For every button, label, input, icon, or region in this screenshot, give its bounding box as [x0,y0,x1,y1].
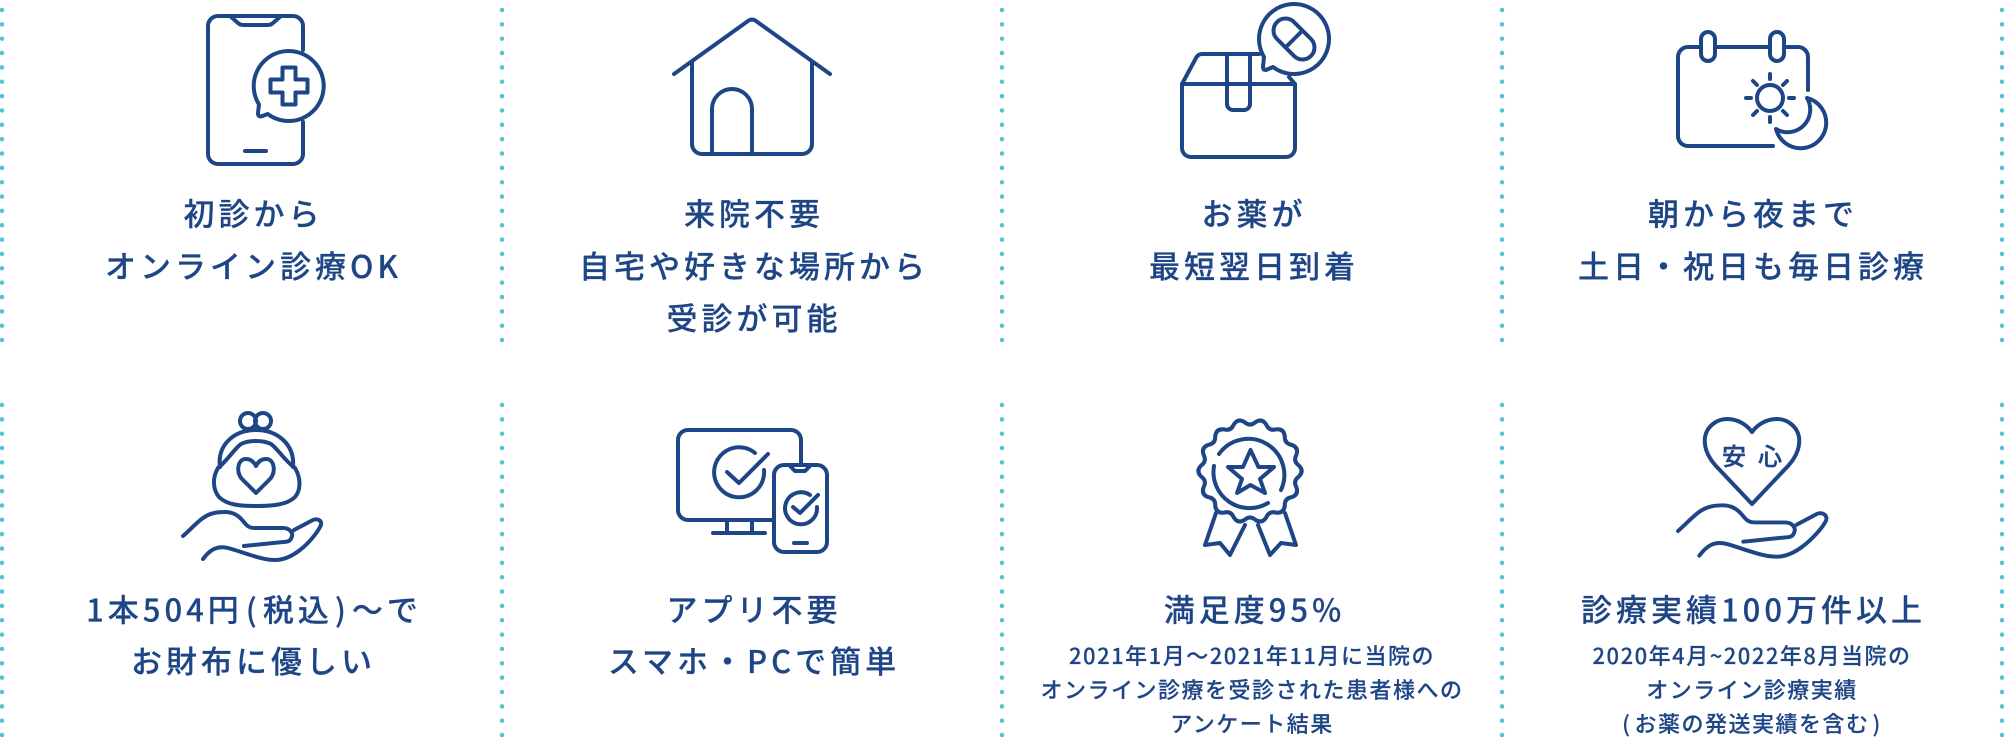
note: survey period: オンライン診療を受診された患者様への [1040,673,1464,705]
heading: no app needed: アプリ不要 [666,586,842,630]
icon: parcel with capsule bubble [1182,4,1329,157]
panel: 95% satisfaction [1040,414,1464,739]
note: results period: (お薬の発送実績を含む) [1622,707,1882,739]
panel: no app needed [608,430,900,682]
note: survey period: 2021年1月〜2021年11月に当院の [1069,639,1435,671]
note: results period: 2020年4月~2022年8月当院の [1593,639,1911,671]
panel: one million consultations [1581,419,1926,739]
panel: low price [86,413,422,682]
icon: rosette with star [1193,414,1307,555]
heading: first consultation online: オンライン診療OK [105,242,402,287]
heading: low price: お財布に優しい [131,637,376,682]
panel: next-day medicine delivery [1149,4,1359,287]
icon: smartphone with medical cross bubble [208,16,324,164]
heading: open morning to night, every day: 朝から夜まで [1648,190,1858,234]
note: results period: オンライン診療実績 [1646,673,1858,705]
heading: next-day medicine delivery: 最短翌日到着 [1149,242,1359,287]
heading: no app needed: スマホ・PCで簡単 [608,637,900,682]
note: survey period: アンケート結果 [1170,707,1334,739]
panel: no hospital visit [579,20,929,339]
panel: open morning to night, every day [1578,32,1928,287]
heading: next-day medicine delivery: お薬が [1202,190,1306,234]
heading: low price: 1本504円(税込)〜で [86,586,422,630]
heading: first consultation online: 初診から [184,190,324,234]
icon: coin purse on hand [183,413,321,560]
heading: open morning to night, every day: 土日・祝日も毎日診療 [1578,242,1928,287]
icon: calendar with sun and moon [1678,32,1826,148]
heading: no hospital visit: 受診が可能 [666,294,842,339]
heading: no hospital visit: 来院不要 [684,190,824,234]
icon text: 安心: 安心 [1722,437,1794,472]
panel: first consultation online [105,16,402,287]
heading: one million consultations: 診療実績100万件以上 [1581,586,1926,630]
icon: house [674,20,830,154]
icon: monitor and smartphone with check marks [678,430,827,552]
heading: no hospital visit: 自宅や好きな場所から [579,242,929,287]
heading: 95% satisfaction: 満足度95% [1164,586,1345,630]
icon: heart with 安心 on hand [1678,419,1826,557]
